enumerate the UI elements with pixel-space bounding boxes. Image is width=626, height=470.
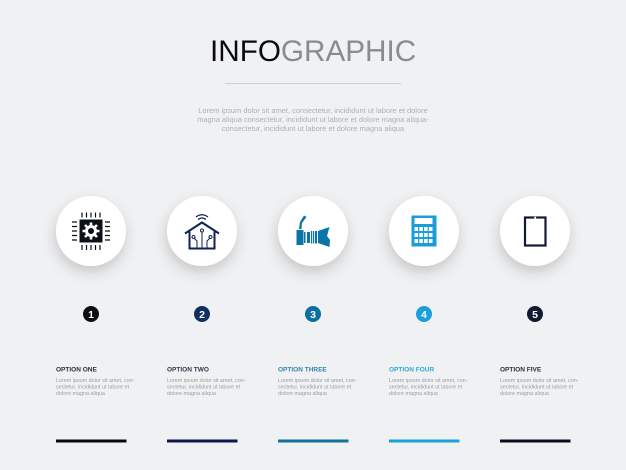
icon: chip with gear	[72, 212, 110, 250]
intro text	[197, 106, 429, 133]
option four text: Lorem ipsum dolor sit amet, con-	[389, 378, 468, 384]
option three text: sectetur, incididunt ut labore et	[278, 384, 352, 390]
icon circle three	[278, 196, 348, 266]
option four text	[389, 366, 468, 397]
intro text: consectetur, incididunt ut labore et dolore magna aliqua	[222, 124, 405, 133]
option one text: Lorem ipsum dolor sit amet, con-	[56, 378, 135, 384]
icon circle five	[500, 196, 570, 266]
icon: calculator	[412, 216, 436, 246]
bar one	[56, 440, 126, 442]
option four text: sectetur, incididunt ut labore et	[389, 384, 463, 390]
bar two	[167, 440, 238, 442]
option three text: dolore magna aliqua	[278, 391, 327, 397]
bar five	[500, 440, 570, 442]
option three text	[278, 366, 357, 397]
option one text: OPTION ONE	[56, 366, 97, 373]
option one text: dolore magna aliqua	[56, 391, 105, 397]
icon: tablet	[525, 217, 546, 246]
number badge 2	[194, 306, 210, 322]
icon circle two	[167, 196, 237, 266]
intro text: Lorem ipsum dolor sit amet, consectetur, incididunt ut labore et dolore	[198, 106, 428, 115]
number badge 5: 5	[532, 309, 538, 321]
option two text: dolore magna aliqua	[167, 391, 216, 397]
number badge 1	[83, 306, 99, 322]
intro text: magna aliqua consectetur, incididunt ut labore et dolore magna aliqua-	[197, 115, 429, 124]
option one text	[56, 366, 135, 397]
bar three	[278, 440, 348, 442]
option two text: sectetur, incididunt ut labore et	[167, 384, 241, 390]
icon circle four	[389, 196, 459, 266]
number badge 1: 1	[88, 309, 94, 321]
number badge 4: 4	[421, 309, 427, 321]
number badge 3	[305, 306, 321, 322]
option five text: Lorem ipsum dolor sit amet, con-	[500, 378, 579, 384]
title: INFOGRAPHIC	[210, 35, 416, 68]
option two text: Lorem ipsum dolor sit amet, con-	[167, 378, 246, 384]
option five text: sectetur, incididunt ut labore et	[500, 384, 574, 390]
number badge 4	[416, 306, 432, 322]
option five text: dolore magna aliqua	[500, 391, 549, 397]
option two text: OPTION TWO	[167, 366, 209, 373]
option five text: OPTION FIVE	[500, 366, 542, 373]
option five text	[500, 366, 579, 397]
option two text	[167, 366, 246, 397]
option one text: sectetur, incididunt ut labore et	[56, 384, 130, 390]
number badge 5	[527, 306, 543, 322]
bar four	[389, 440, 460, 442]
panel: option four	[389, 196, 468, 442]
option three text: OPTION THREE	[278, 366, 327, 373]
option four text: dolore magna aliqua	[389, 391, 438, 397]
icon circle one	[56, 196, 126, 266]
icon: smart home	[185, 215, 219, 248]
icon: camera	[296, 216, 330, 247]
option four text: OPTION FOUR	[389, 366, 434, 373]
panel: option two	[167, 196, 246, 442]
panel: option three	[278, 196, 357, 442]
number badge 3: 3	[310, 309, 316, 321]
panel: option one	[56, 196, 135, 442]
panel: option five	[500, 196, 579, 442]
option three text: Lorem ipsum dolor sit amet, con-	[278, 378, 357, 384]
number badge 2: 2	[199, 309, 205, 321]
